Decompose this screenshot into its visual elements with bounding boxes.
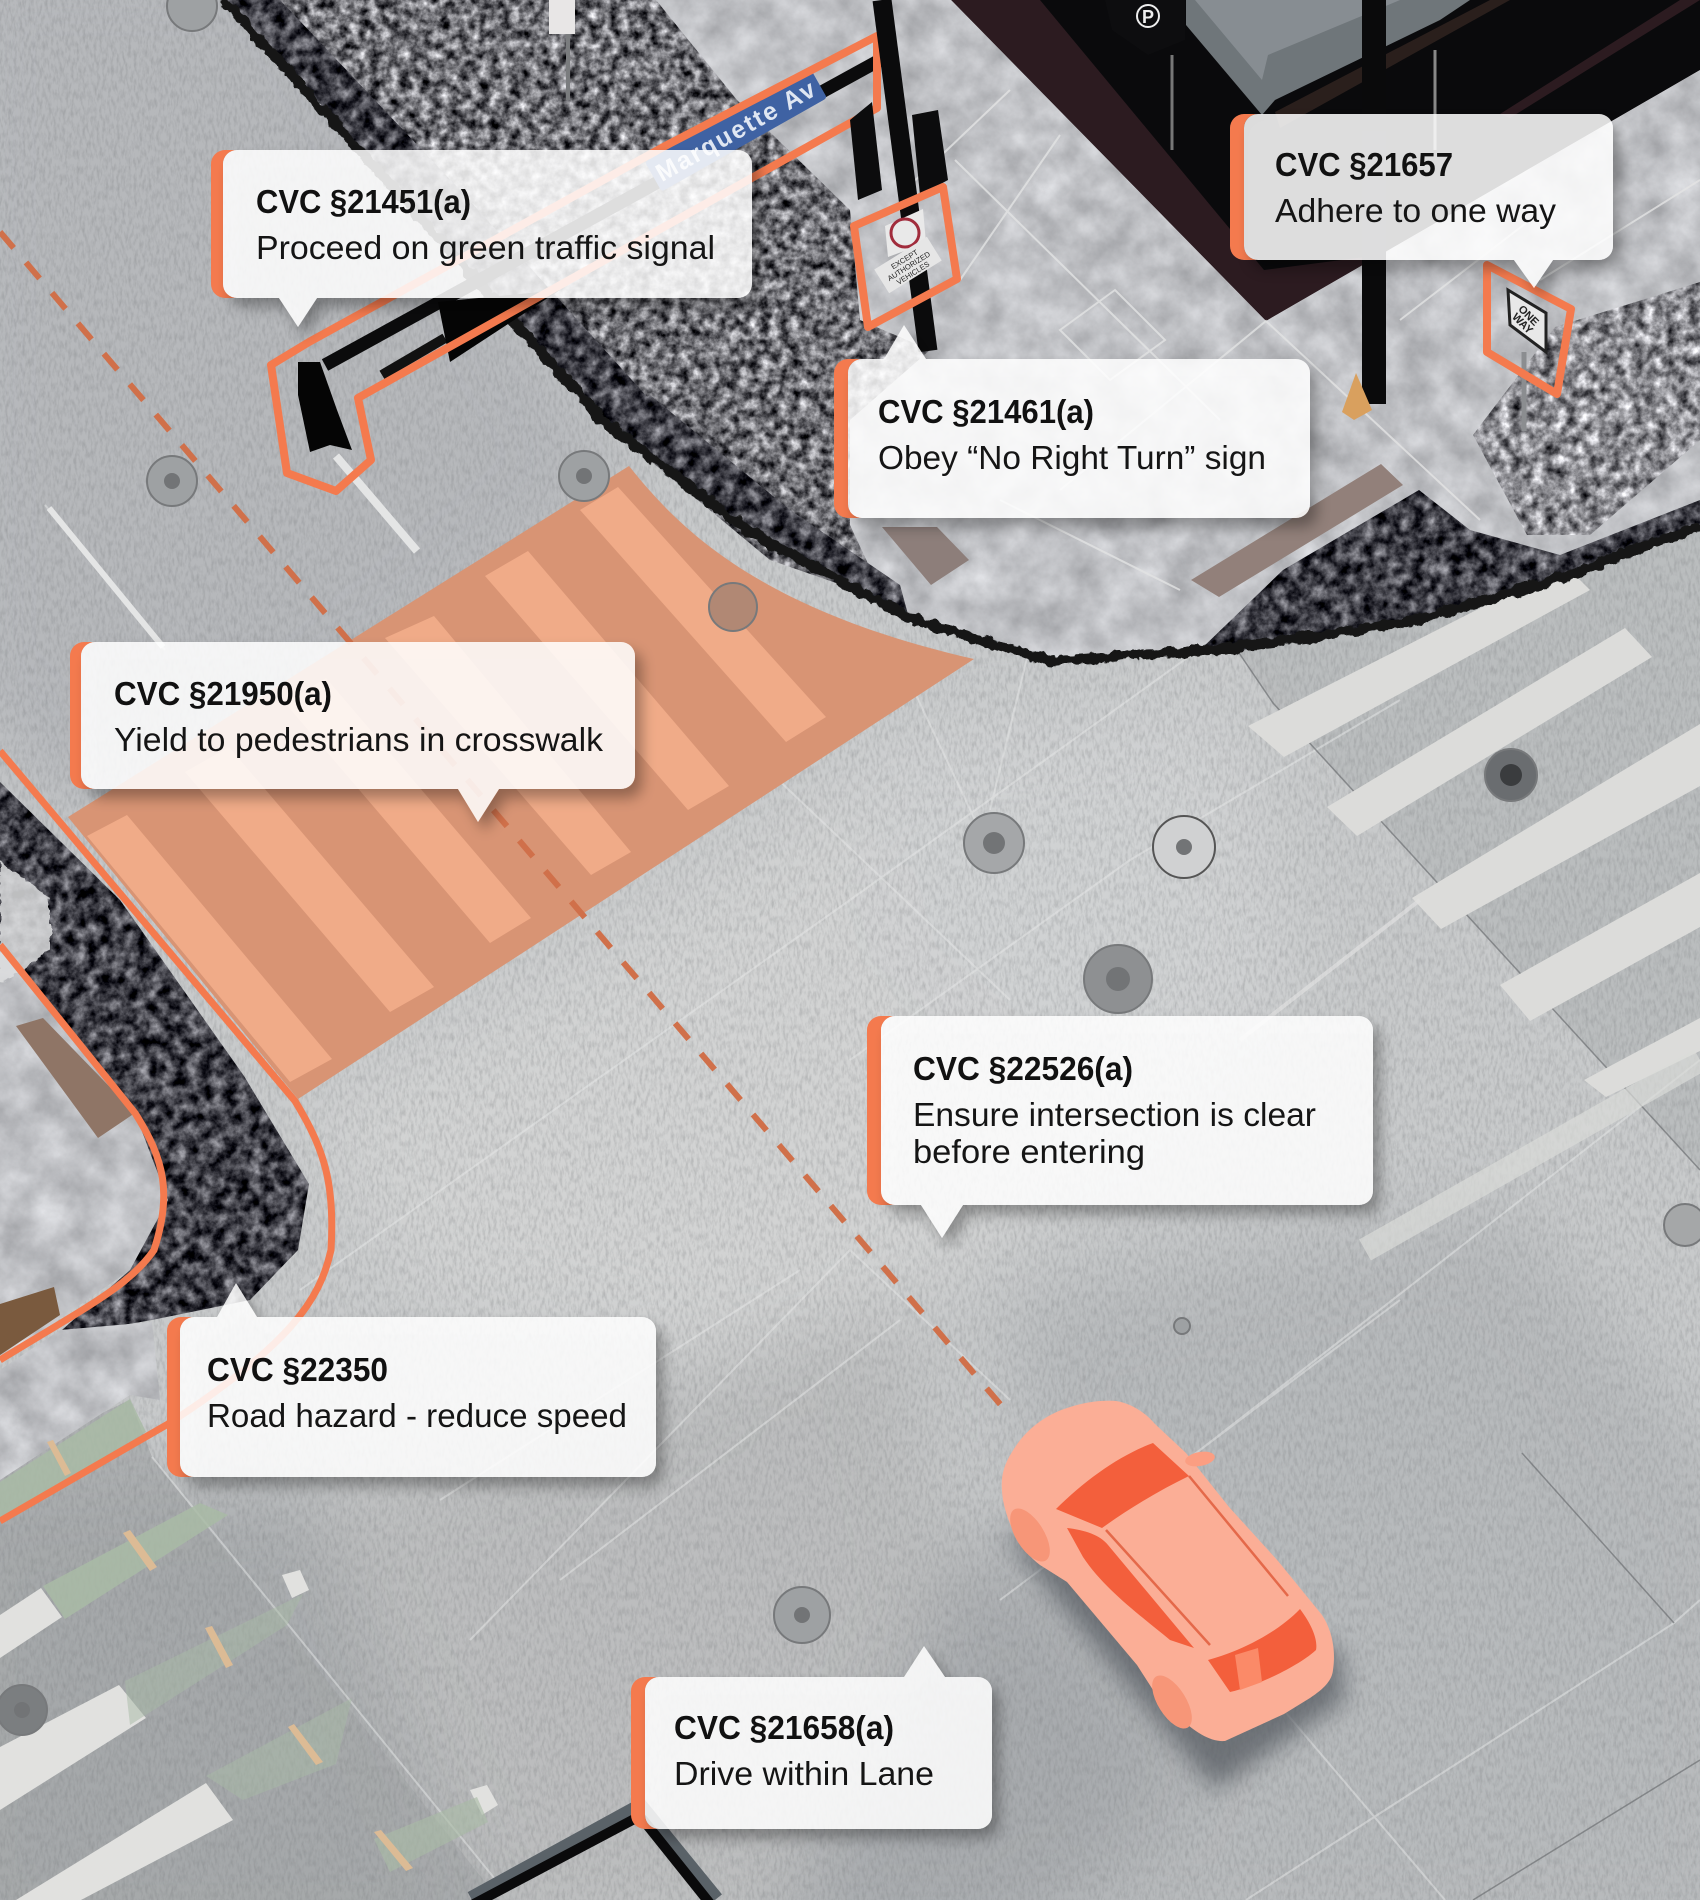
- dirt along lower right of corner: [1200, 282, 1700, 652]
- white lane lines: [49, 456, 417, 647]
- callout: CVC 21461(a): [834, 325, 1310, 518]
- sign plate: VEHICLES: [895, 259, 931, 287]
- windshield: [1056, 1443, 1189, 1528]
- callout: CVC 21657: Adhere to one way: [1275, 192, 1557, 229]
- callout: CVC 21950(a): [70, 642, 635, 822]
- dark curb line: [224, 0, 1700, 661]
- callout: CVC 21658(a): [631, 1646, 992, 1829]
- snow by hazard corner: [0, 1322, 160, 1480]
- signal head: [298, 362, 352, 452]
- sign highlight outline: [1487, 265, 1571, 394]
- sign plate: AUTHORIZED: [886, 249, 932, 283]
- bike lane and ticks: [0, 1399, 488, 1872]
- car shadow: [1000, 1530, 1345, 1790]
- concrete joints: [45, 505, 1700, 1900]
- side window: [1067, 1528, 1194, 1648]
- callout: CVC 22350: [167, 1283, 656, 1477]
- mast arm: [325, 60, 880, 365]
- no turn sign: [885, 209, 926, 257]
- road hazard curb outlines: [0, 751, 332, 1521]
- signal heads: [850, 102, 882, 200]
- darker crosswalk pavement at right: [1237, 530, 1700, 1170]
- rough concrete band: [1365, 1060, 1700, 1250]
- callout: CVC 21658(a): CVC §21658(a): [674, 1709, 894, 1746]
- orange crosswalk overlay: [68, 466, 974, 1099]
- sign plate: EXCEPT: [889, 248, 920, 271]
- callout: CVC 22526(a): before entering: [913, 1133, 1145, 1170]
- callout: CVC 22350: CVC §22350: [207, 1351, 388, 1388]
- traffic signal arm with street sign: [271, 36, 880, 491]
- right crosswalk stripes: [1248, 565, 1700, 1097]
- callout: CVC 21461(a): Obey “No Right Turn” sign: [878, 439, 1266, 476]
- callout: CVC 21657: CVC §21657: [1275, 146, 1453, 183]
- lower-left crosswalk stripes and bike lane: [0, 1570, 498, 1900]
- darker pavement at lower left: [0, 1400, 499, 1900]
- callout: CVC 21950(a): CVC §21950(a): [114, 675, 332, 712]
- callout: CVC 22350: Road hazard - reduce speed: [207, 1397, 627, 1434]
- brick patches on corner sidewalk: [882, 464, 1403, 597]
- lower-left corner sidewalk: [0, 945, 168, 1360]
- highlight outline: [271, 36, 877, 491]
- parking sign: [1105, 0, 1435, 150]
- one way sign: [1487, 265, 1571, 431]
- snow near lower-left: [0, 860, 50, 985]
- one way sign: WAY: [1509, 311, 1535, 337]
- callout: CVC 22526(a): CVC §22526(a): [913, 1050, 1133, 1087]
- callout: CVC 21451(a): [211, 150, 752, 327]
- callout: CVC 22526(a): Ensure intersection is clear: [913, 1096, 1316, 1133]
- one way sign: ONE: [1515, 303, 1541, 329]
- sidewalk: [656, 0, 1700, 660]
- brick patches on lower-left sidewalk: [0, 1018, 135, 1355]
- car highlighted in orange: [1000, 1401, 1345, 1790]
- dashed lane path: [0, 232, 1006, 1411]
- sign plate: [874, 237, 942, 293]
- callout: CVC 21451(a): Proceed on green traffic signal: [256, 229, 715, 266]
- traffic light pole and no-right-turn sign: [850, 0, 957, 351]
- callout: CVC 21451(a): CVC §21451(a): [256, 183, 471, 220]
- crosswalk stripes: [87, 487, 826, 1082]
- street sign: Marquette Av: [651, 74, 822, 188]
- car body: [1002, 1401, 1334, 1741]
- callout: CVC 21658(a): Drive within Lane: [674, 1755, 934, 1792]
- no-parking sign top: [549, 0, 575, 100]
- sign highlight outline: [854, 187, 957, 327]
- callout: CVC 21461(a): CVC §21461(a): [878, 393, 1094, 430]
- callout: CVC 22526(a): [867, 1016, 1373, 1238]
- dark band along median curb: [224, 0, 650, 424]
- parking sign: P: [1142, 7, 1154, 27]
- pole: [882, 0, 928, 351]
- callout: CVC 21657: [1230, 114, 1613, 288]
- wheels: [1002, 1502, 1058, 1568]
- roof rails: [1106, 1476, 1288, 1645]
- mirror: [1184, 1450, 1216, 1468]
- rear window: [1208, 1609, 1316, 1692]
- callout: CVC 21950(a): Yield to pedestrians in crosswalk: [114, 721, 603, 758]
- black pole and cone: [1342, 0, 1386, 420]
- dirt median at upper corner: [224, 0, 930, 618]
- black frame at bottom: [470, 1808, 715, 1900]
- lower-left dirt: [0, 782, 309, 1337]
- building wall and roof: [951, 0, 1700, 321]
